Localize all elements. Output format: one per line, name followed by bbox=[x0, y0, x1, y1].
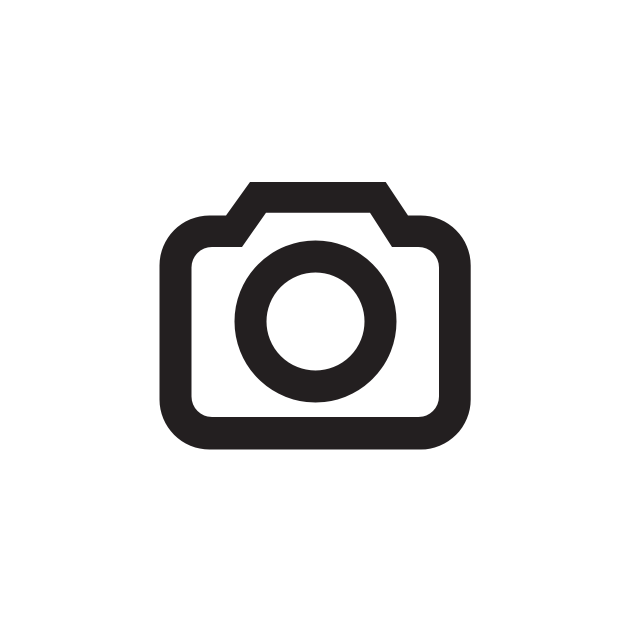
camera body outline bbox=[160, 182, 471, 450]
camera lens ring bbox=[250, 256, 380, 386]
